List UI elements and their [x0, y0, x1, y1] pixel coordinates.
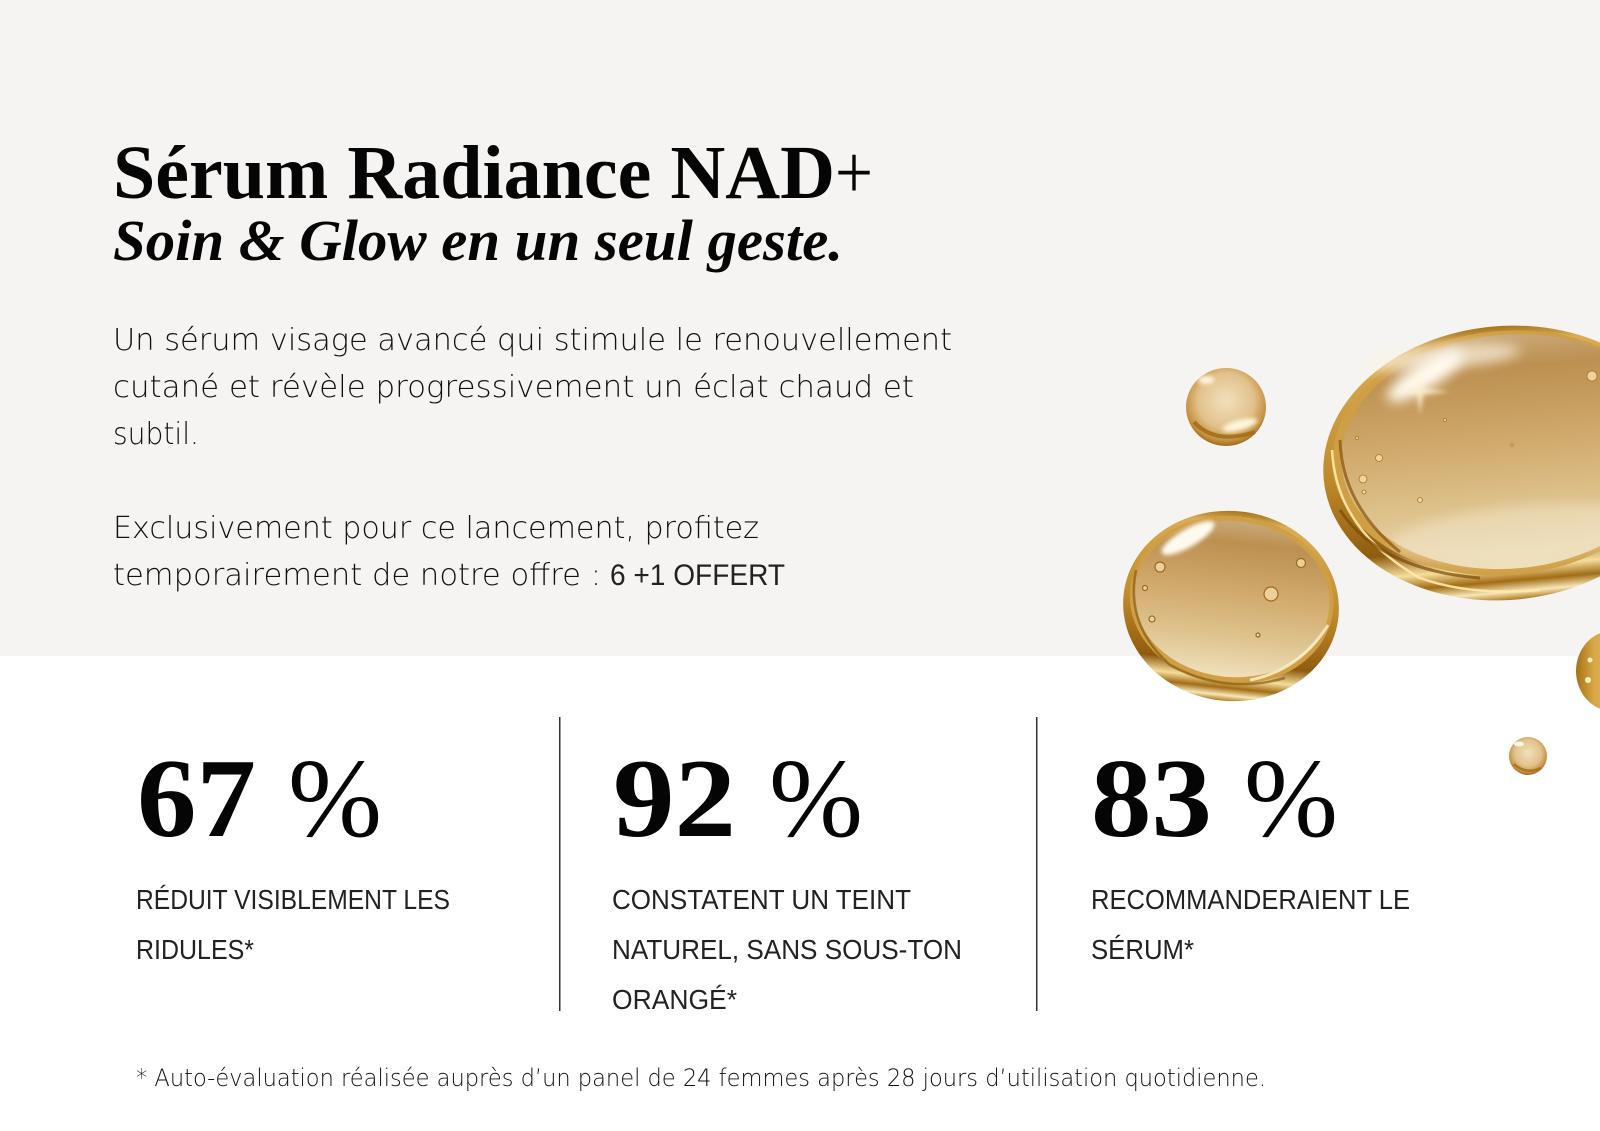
- launch offer: temporairement de notre offre :: [113, 558, 601, 593]
- divider: [559, 717, 560, 1011]
- panel: top beige background: [0, 0, 1600, 656]
- caption: [612, 884, 962, 1015]
- subtitle: Soin & Glow en un seul geste.: [113, 208, 843, 273]
- footnote: * Auto-évaluation réalisée auprès d’un panel de 24 femmes après 28 jours d’utilisation quotidienne.: [136, 1064, 1266, 1092]
- number: [1091, 737, 1338, 861]
- icon: tiny serum drop: [1509, 737, 1547, 775]
- title: +: [835, 131, 873, 215]
- title: Sérum Radiance NAD: [113, 131, 835, 215]
- caption: [136, 884, 450, 965]
- caption: [1091, 884, 1410, 965]
- panel: statistic 83 percent: [1091, 737, 1410, 965]
- number: %: [1244, 737, 1338, 861]
- number: 92: [613, 737, 736, 861]
- number: %: [288, 737, 382, 861]
- caption: RÉDUIT VISIBLEMENT LES: [136, 884, 450, 915]
- panel: statistic 92 percent: [612, 737, 962, 1015]
- panel: product introduction: [113, 131, 952, 593]
- caption: CONSTATENT UN TEINT: [612, 884, 911, 915]
- number: [613, 737, 863, 861]
- description paragraph: cutané et révèle progressivement un éclat chaud et: [113, 370, 914, 405]
- launch offer: Exclusivement pour ce lancement, profitez: [113, 511, 759, 546]
- caption: SÉRUM*: [1091, 934, 1194, 965]
- number: 83: [1091, 737, 1212, 861]
- launch offer: [113, 511, 785, 593]
- description paragraph: subtil.: [113, 417, 199, 452]
- description paragraph: [113, 323, 952, 452]
- icon: small serum drop: [1186, 368, 1266, 446]
- caption: NATUREL, SANS SOUS-TON: [612, 934, 962, 965]
- number: 67: [137, 737, 256, 861]
- caption: RECOMMANDERAIENT LE: [1091, 884, 1410, 915]
- icon: large serum drop: [1312, 311, 1600, 615]
- caption: RIDULES*: [136, 934, 254, 965]
- divider: [1036, 717, 1038, 1011]
- icon: serum drop cut off at right edge: [1576, 631, 1600, 711]
- number: [137, 737, 382, 861]
- launch offer: 6 +1 OFFERT: [610, 559, 785, 592]
- caption: ORANGÉ*: [612, 984, 737, 1015]
- number: %: [769, 737, 863, 861]
- description paragraph: Un sérum visage avancé qui stimule le renouvellement: [113, 323, 952, 358]
- icon: medium serum drop: [1114, 500, 1348, 712]
- panel: statistic 67 percent: [136, 737, 450, 965]
